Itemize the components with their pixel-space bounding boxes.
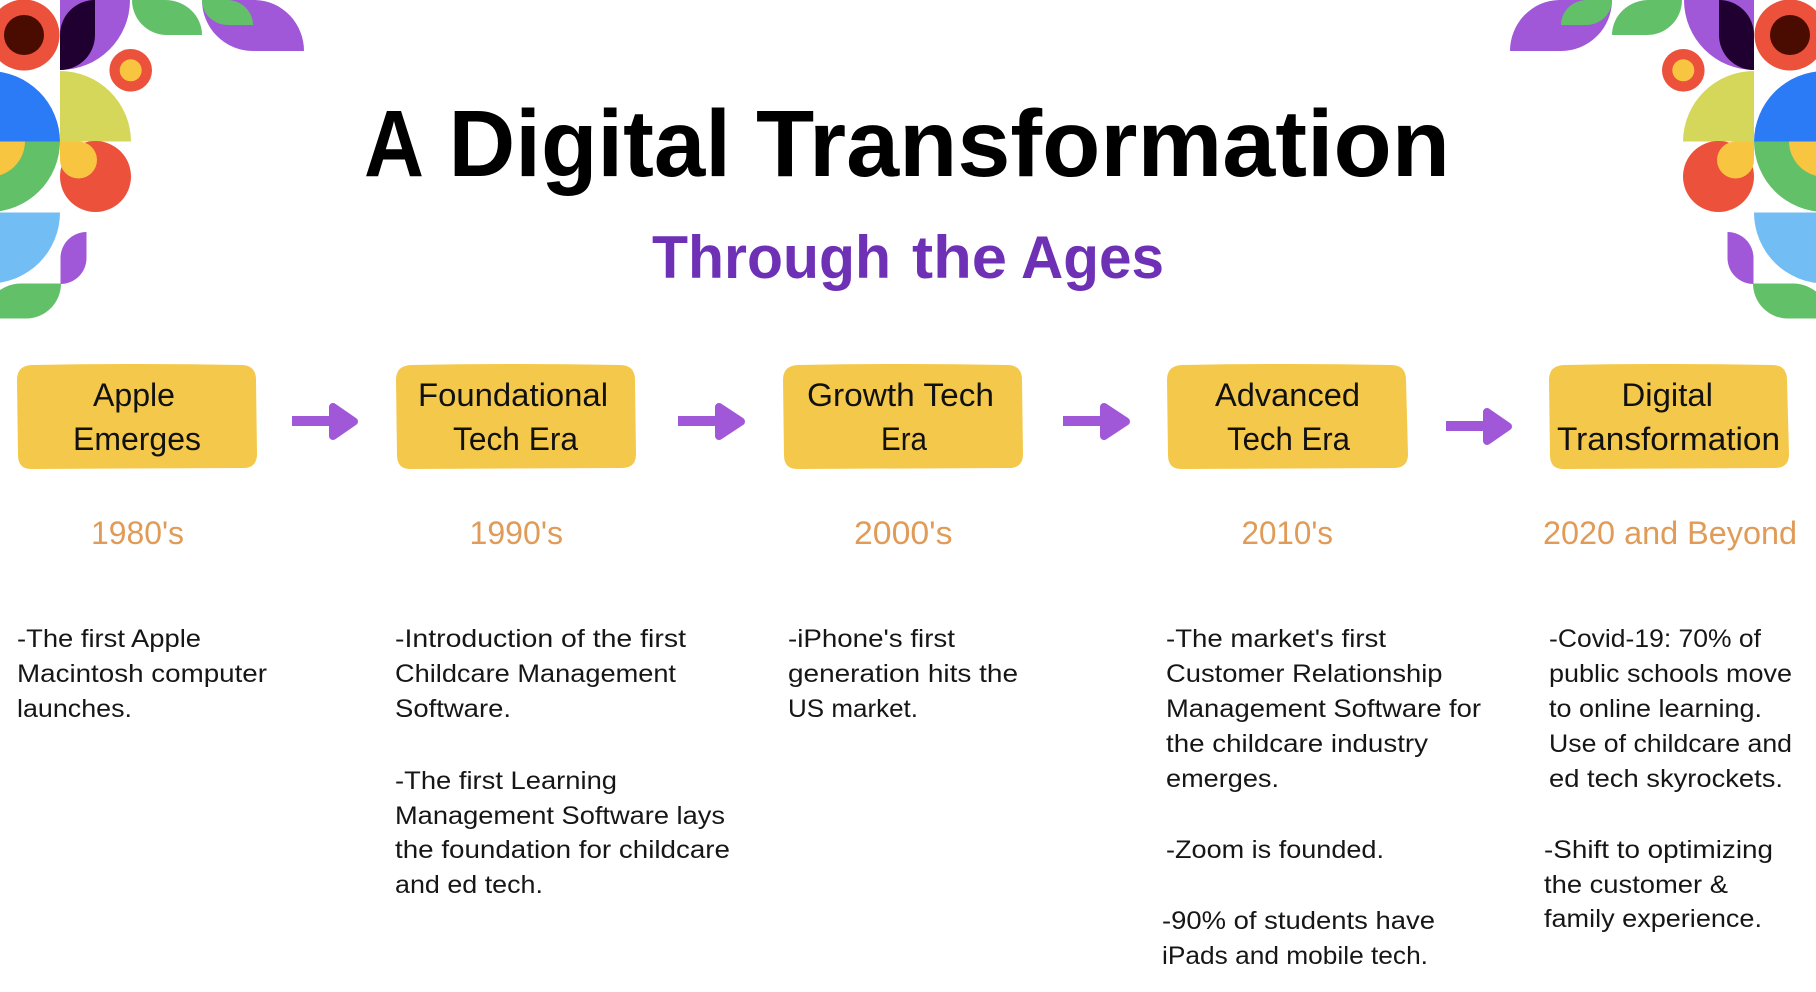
- text block: 2000's details: -iPhone's first: [788, 625, 955, 653]
- title: Transformation: [756, 91, 1450, 197]
- text block: 2000's details: generation hits the: [788, 660, 1018, 688]
- arrow 3: [1063, 407, 1126, 436]
- title: Digital: [448, 91, 731, 197]
- arrow 2: [678, 407, 741, 436]
- text block: 2020 and beyond details: family experience.: [1544, 905, 1762, 933]
- text block: 2010's details: -The market's first: [1166, 625, 1386, 653]
- text block: 2010's details: emerges.: [1166, 765, 1279, 793]
- text block: 2020 and beyond details: [1544, 625, 1792, 933]
- text block: 1990's details: -The first Learning: [395, 767, 617, 795]
- text block: 2020 and beyond details: the customer &: [1544, 871, 1728, 899]
- box: Digital Transformation: Digital: [1622, 377, 1713, 413]
- text block: 2000's details: US market.: [788, 695, 918, 723]
- box: Digital Transformation: [1549, 364, 1789, 469]
- text block: 2020 and beyond details: ed tech skyrockets.: [1549, 765, 1783, 793]
- text block: 2010's details: iPads and mobile tech.: [1162, 942, 1428, 970]
- box: Foundational Tech Era: Foundational: [418, 377, 608, 413]
- decoration: top left geometric corner: [0, 0, 304, 318]
- text block: 1990's details: Software.: [395, 695, 511, 723]
- text block: 1990's details: and ed tech.: [395, 871, 543, 899]
- text block: 2010's details: Customer Relationship: [1166, 660, 1442, 688]
- subtitle: Ages: [1021, 224, 1164, 291]
- box: Growth Tech Era: Growth Tech: [807, 377, 994, 413]
- text block: 1990's details: [395, 625, 730, 899]
- year: 2020 and Beyond: 2020 and Beyond: [1543, 515, 1797, 551]
- title: [364, 91, 1450, 197]
- box: Apple Emerges: Emerges: [73, 421, 201, 457]
- box: Growth Tech Era: Era: [881, 421, 927, 457]
- text block: 2010's details: Management Software for: [1166, 695, 1481, 723]
- text block: 2010's details: [1162, 625, 1481, 970]
- box: Apple Emerges: Apple: [93, 377, 175, 413]
- year: 2000's: 2000's: [854, 515, 952, 551]
- text block: 2020 and beyond details: -Shift to optimizing: [1544, 836, 1773, 864]
- text block: 2020 and beyond details: -Covid-19: 70% of: [1549, 625, 1761, 653]
- text block: 2010's details: -Zoom is founded.: [1166, 836, 1384, 864]
- year: 2010's: 2010's: [1242, 515, 1333, 551]
- subtitle: the: [912, 224, 1007, 291]
- subtitle: [652, 224, 1164, 291]
- text block: 1980's details: Macintosh computer: [17, 660, 267, 688]
- title: A: [364, 91, 424, 197]
- text block: 2010's details: the childcare industry: [1166, 730, 1429, 758]
- text block: 1990's details: -Introduction of the first: [395, 625, 686, 653]
- text block: 1990's details: the foundation for childcare: [395, 836, 730, 864]
- text block: 1980's details: -The first Apple: [17, 625, 201, 653]
- text block: 1980's details: [17, 625, 267, 723]
- text block: 2020 and beyond details: to online learning.: [1549, 695, 1762, 723]
- box: Growth Tech Era: [783, 364, 1023, 469]
- box: Advanced Tech Era: Tech Era: [1227, 421, 1350, 457]
- text block: 2020 and beyond details: public schools move: [1549, 660, 1792, 688]
- decoration: top right geometric corner: [1510, 0, 1816, 318]
- subtitle: Through: [652, 224, 891, 291]
- text block: 1990's details: Management Software lays: [395, 802, 725, 830]
- arrow 1: [292, 407, 354, 436]
- text block: 2000's details: [788, 625, 1018, 723]
- year: 1990's: 1990's: [470, 515, 563, 551]
- arrow 4: [1446, 412, 1508, 441]
- box: Advanced Tech Era: [1167, 364, 1408, 469]
- box: Foundational Tech Era: [396, 364, 636, 469]
- box: Foundational Tech Era: Tech Era: [453, 421, 578, 457]
- text block: 1990's details: Childcare Management: [395, 660, 676, 688]
- year: 1980's: 1980's: [91, 515, 184, 551]
- text block: 1980's details: launches.: [17, 695, 132, 723]
- text block: 2020 and beyond details: Use of childcare and: [1549, 730, 1792, 758]
- text block: 2010's details: -90% of students have: [1162, 907, 1435, 935]
- box: Digital Transformation: Transformation: [1557, 421, 1780, 457]
- box: Apple Emerges: [17, 364, 257, 469]
- box: Advanced Tech Era: Advanced: [1215, 377, 1360, 413]
